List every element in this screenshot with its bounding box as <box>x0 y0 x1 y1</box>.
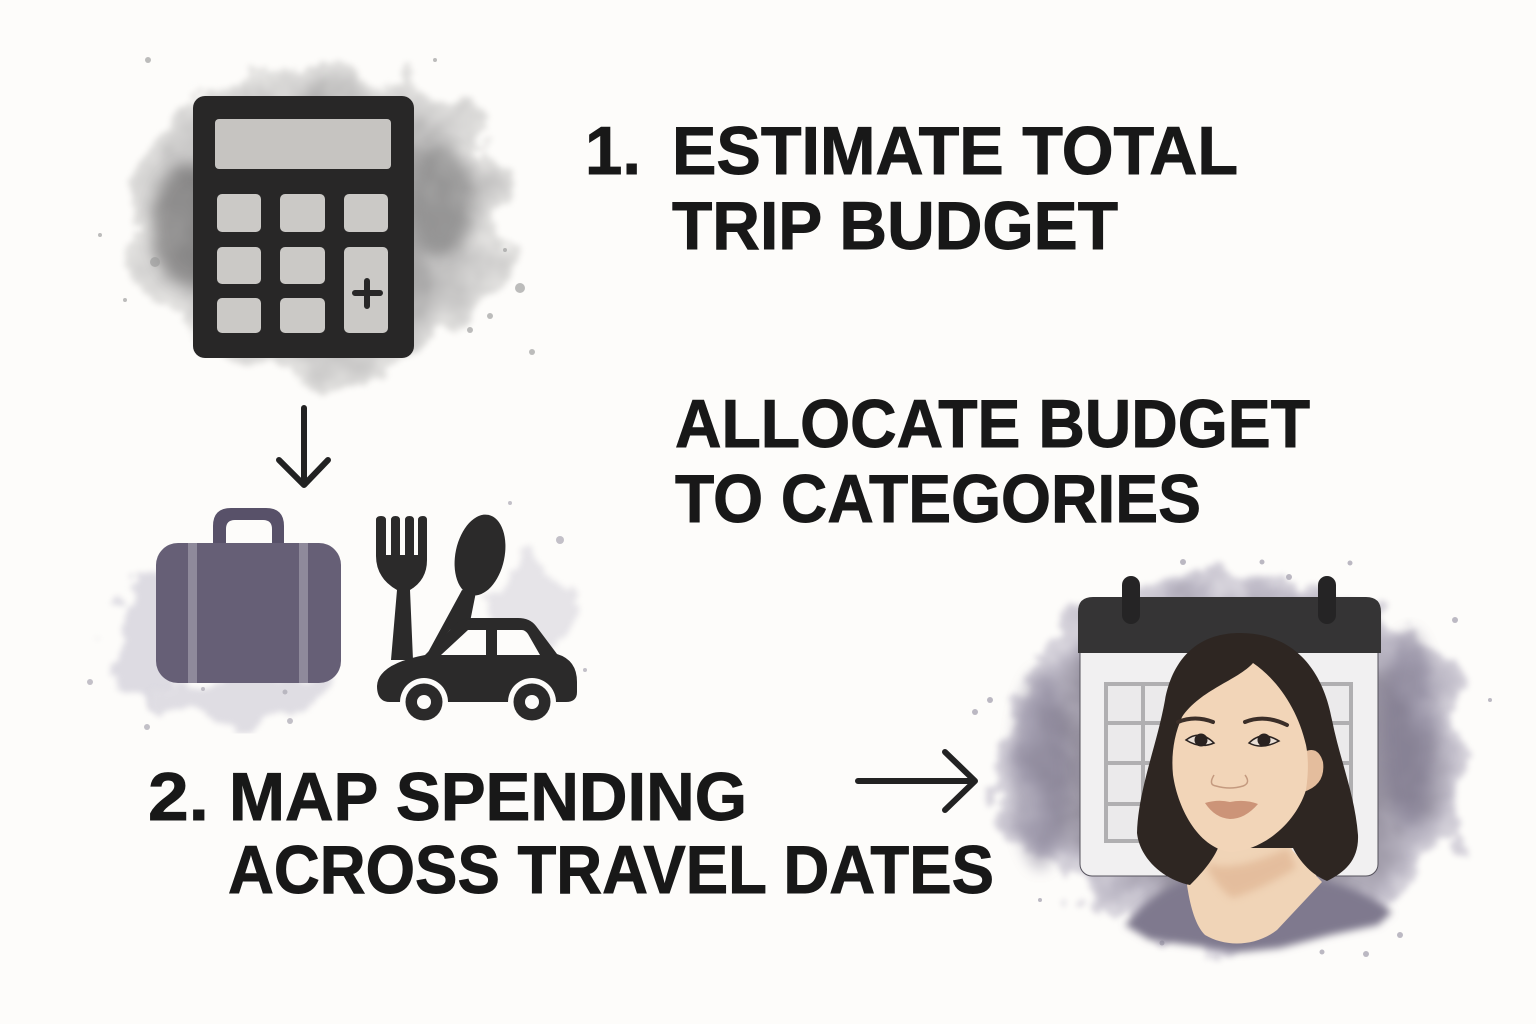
watercolor wash: calculator <box>98 57 535 378</box>
spoon <box>425 510 512 658</box>
wheels <box>400 678 556 726</box>
icon: calculator <box>193 96 414 358</box>
calendar header <box>1078 597 1381 653</box>
shirt <box>1125 880 1392 952</box>
car body <box>377 618 577 702</box>
icon: suitcase <box>156 508 341 683</box>
calendar rings <box>1122 576 1140 624</box>
watercolor wash: calendar <box>972 559 1492 957</box>
step 1 heading: TRIP BUDGET <box>672 188 1118 264</box>
car windows <box>441 630 540 655</box>
hair <box>1137 633 1358 885</box>
step 1 heading: ESTIMATE TOTAL <box>672 113 1238 189</box>
step 2 heading <box>148 759 994 908</box>
neck shadow <box>1205 848 1296 898</box>
arrow: to calendar <box>858 752 975 810</box>
icon: fork, spoon and car <box>376 510 577 726</box>
fork <box>376 516 427 660</box>
icon: calendar <box>1078 576 1381 876</box>
step 2 heading: MAP SPENDING <box>229 759 747 835</box>
eyebrows <box>1178 718 1287 725</box>
lips <box>1205 801 1258 819</box>
ear <box>1303 750 1323 792</box>
watercolor wash: luggage and car <box>87 501 587 730</box>
allocate heading: TO CATEGORIES <box>675 461 1201 537</box>
neck <box>1187 820 1322 943</box>
portrait: woman <box>1125 633 1392 952</box>
nose <box>1211 775 1248 788</box>
face <box>1172 663 1308 852</box>
step 2 heading: 2. <box>148 759 209 835</box>
calculator keys <box>217 194 388 333</box>
allocate heading <box>675 386 1310 537</box>
calculator display <box>215 119 391 169</box>
allocate heading: ALLOCATE BUDGET <box>675 386 1310 462</box>
step 1 heading: 1. <box>585 113 641 189</box>
calendar grid <box>1106 684 1351 841</box>
step 1 heading <box>585 113 1238 264</box>
step 2 heading: ACROSS TRAVEL DATES <box>228 832 994 908</box>
arrow: calculator down to categories <box>279 408 328 485</box>
eyes <box>1186 734 1279 746</box>
plus sign <box>355 281 380 306</box>
